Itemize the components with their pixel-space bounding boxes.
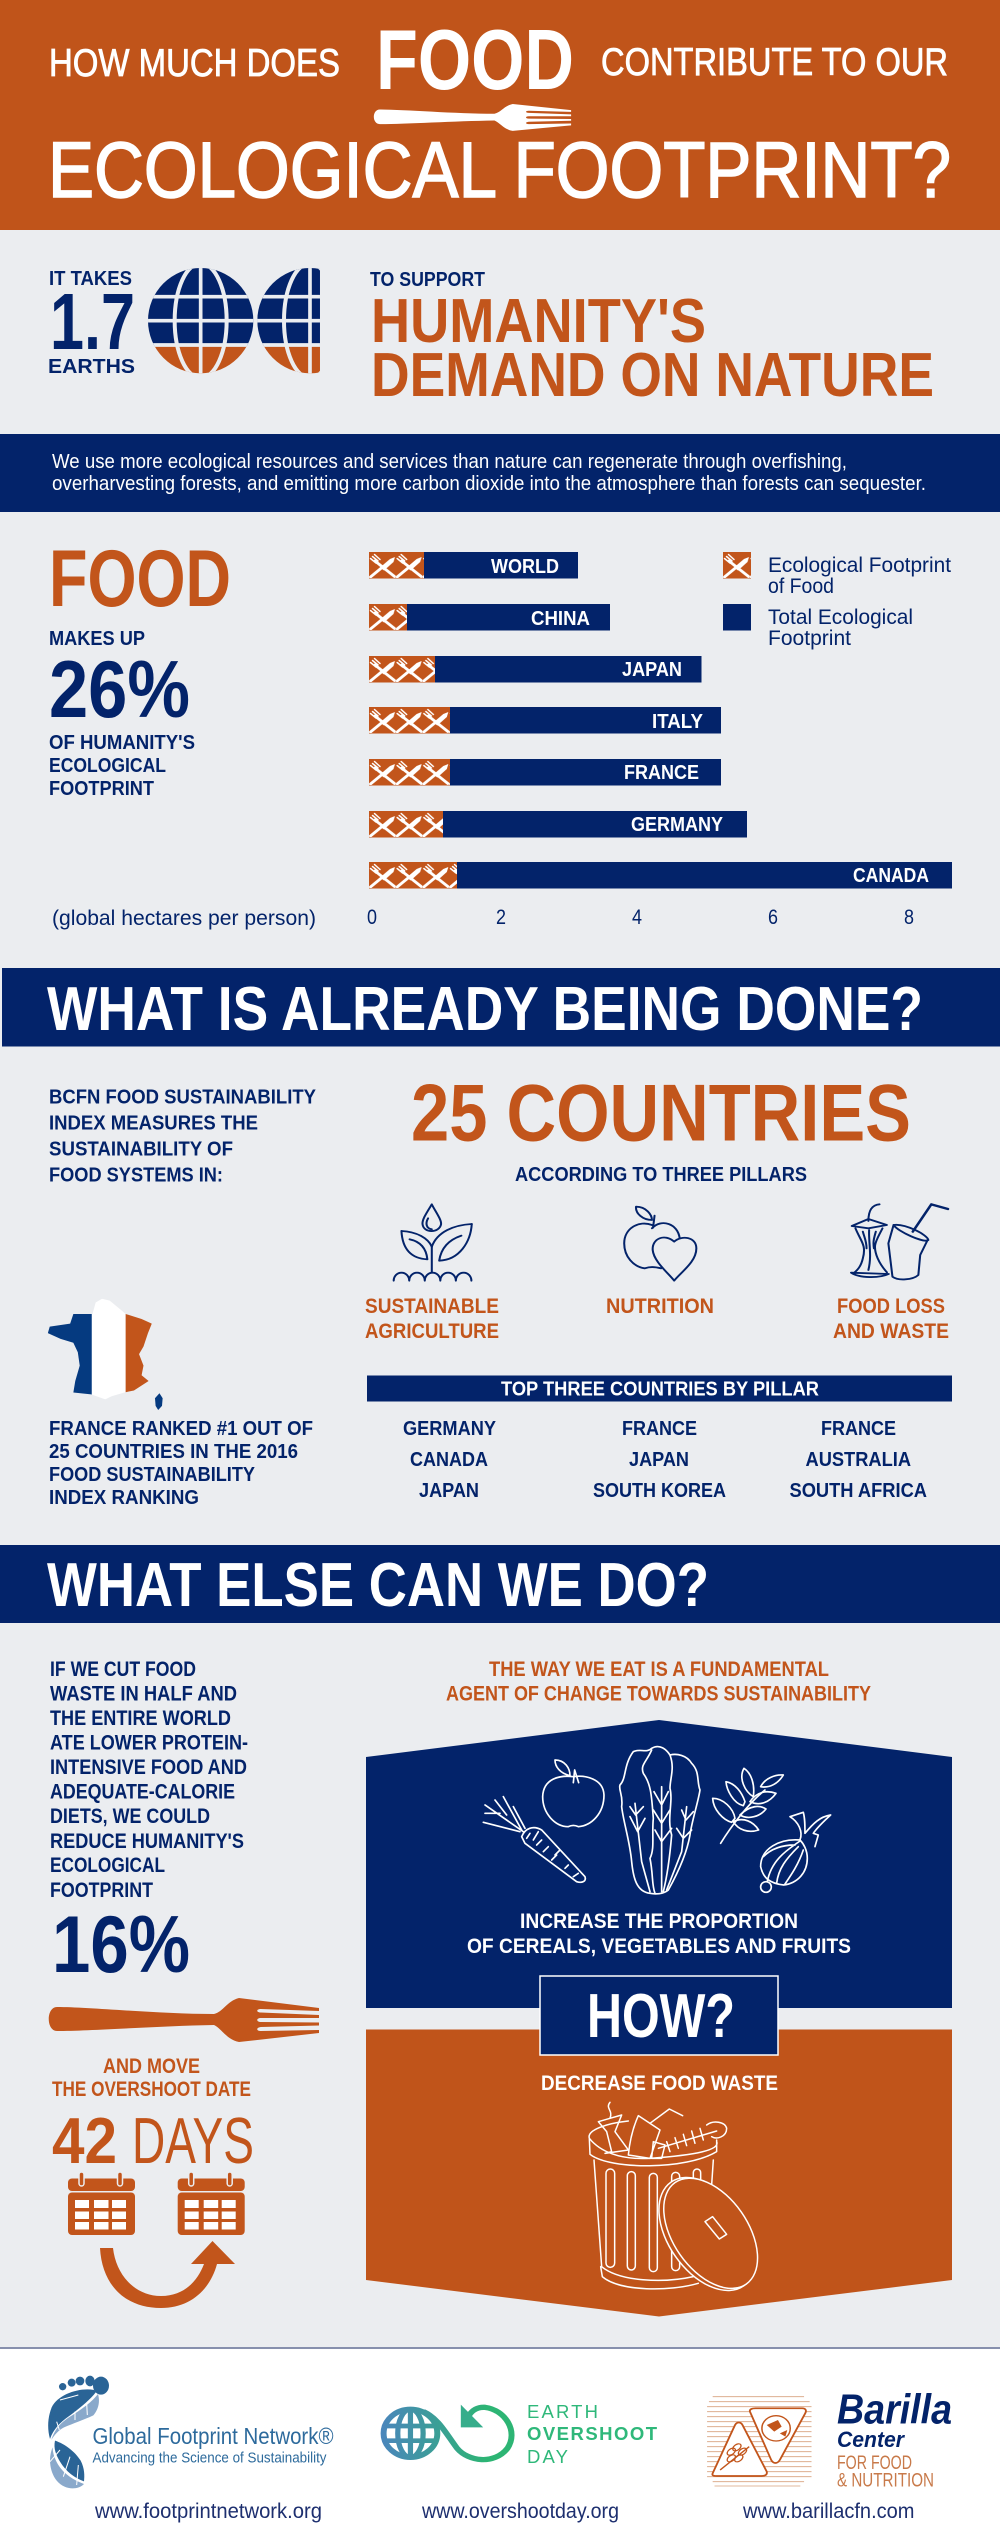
- legend label: food footprint: [768, 554, 951, 598]
- bar: world: WORLD: [491, 555, 559, 578]
- text block: bcfn index: BCFN FOOD SUSTAINABILITY: [49, 1086, 317, 1108]
- legend label: total footprint: Total Ecological: [768, 606, 913, 629]
- table column: food loss and waste: SOUTH AFRICA: [790, 1480, 927, 1502]
- text block: france ranked first: INDEX RANKING: [49, 1487, 199, 1509]
- logo text: earth overshoot day: DAY: [527, 2446, 568, 2467]
- url: overshoot day: www.overshootday.org: [421, 2500, 619, 2523]
- text: the way we eat: [446, 1658, 871, 1706]
- number: 26%: 26%: [49, 645, 190, 735]
- text: intro line 1: We use more ecological resources and services than nature can regenerate through overfishing,: [52, 451, 847, 473]
- panel: title header: [0, 0, 1000, 230]
- table column: nutrition: FRANCE: [622, 1418, 697, 1440]
- icon: full globe: [148, 268, 254, 374]
- text: increase the proportion: OF CEREALS, VEGETABLES AND FRUITS: [467, 1934, 851, 1958]
- logo text: earth overshoot day: OVERSHOOT: [527, 2423, 658, 2444]
- axis: labels: 2: [496, 906, 506, 929]
- bar: germany: [369, 811, 747, 838]
- icon: partial globe: [257, 268, 320, 374]
- text: and move the overshoot date: AND MOVE: [103, 2055, 200, 2078]
- logo text: earth overshoot day: EARTH: [527, 2401, 598, 2422]
- pillar label: sustainable agriculture: SUSTAINABLE: [365, 1295, 499, 1318]
- logo: barilla center: [707, 2386, 952, 2492]
- bar: italy: ITALY: [652, 710, 703, 733]
- table column: nutrition: JAPAN: [629, 1449, 689, 1471]
- pillar label: food loss and waste: AND WASTE: [833, 1320, 949, 1343]
- legend swatch: food footprint: [723, 552, 751, 578]
- logo: earth overshoot day: [384, 2401, 658, 2467]
- pillar label: sustainable agriculture: AGRICULTURE: [365, 1320, 499, 1343]
- legend swatch: total footprint: [723, 604, 751, 630]
- panel: increase proportion: [366, 1720, 952, 2008]
- legend label: total footprint: [768, 606, 913, 650]
- title line: how much does: HOW MUCH DOES: [49, 42, 340, 85]
- bar: japan: JAPAN: [622, 658, 682, 681]
- logo tagline: advancing the science: Advancing the Science of Sustainability: [92, 2449, 327, 2466]
- text block: cut food waste: ECOLOGICAL: [50, 1854, 165, 1877]
- text: to support: TO SUPPORT: [370, 268, 485, 291]
- icon: lettuce: [620, 1747, 700, 1894]
- icon: white fork: [374, 104, 571, 131]
- table column: sustainable agriculture: GERMANY: [403, 1418, 497, 1440]
- panel: it takes 1.7 earths: [49, 268, 932, 396]
- text: of humanity's ecological footprint: ECOLOGICAL: [49, 755, 166, 777]
- icon: carrot: [483, 1797, 585, 1882]
- text: decrease food waste: DECREASE FOOD WASTE: [541, 2071, 778, 2095]
- text block: bcfn index: SUSTAINABILITY OF: [49, 1138, 233, 1160]
- icon: apple and heart: [624, 1207, 696, 1281]
- panel: decrease food waste: [366, 2030, 952, 2316]
- table heading: top three countries: TOP THREE COUNTRIES BY PILLAR: [501, 1378, 820, 1400]
- bar: germany: GERMANY: [631, 813, 723, 836]
- text block: bcfn index: INDEX MEASURES THE: [49, 1112, 258, 1134]
- bar: italy: [369, 707, 721, 734]
- callout: how box: HOW?: [587, 1982, 735, 2051]
- logo text: for food and nutrition: & NUTRITION: [837, 2471, 934, 2492]
- text: of humanity's ecological footprint: OF HUMANITY'S: [49, 732, 195, 754]
- table column: food loss and waste: AUSTRALIA: [806, 1449, 911, 1471]
- icon: orange fork: [49, 1998, 319, 2042]
- text: it takes: IT TAKES: [49, 267, 132, 290]
- icon: calendar left: [68, 2172, 135, 2235]
- bar: france: [369, 759, 721, 786]
- text: and move the overshoot date: [52, 2055, 251, 2101]
- number: 1.7: 1.7: [50, 277, 135, 366]
- text block: cut food waste: [50, 1658, 248, 1902]
- logo: global footprint network: [48, 2376, 334, 2488]
- title word: food: FOOD: [376, 13, 574, 108]
- table column: sustainable agriculture: [403, 1418, 497, 1502]
- text: intro line 2: overharvesting forests, and emitting more carbon dioxide into the atmosphere than forests can sequester.: [52, 473, 926, 495]
- text block: cut food waste: WASTE IN HALF AND: [50, 1683, 237, 1706]
- logo text: earth overshoot day: [527, 2401, 658, 2467]
- text: increase the proportion: INCREASE THE PROPORTION: [520, 1909, 798, 1933]
- number: 42 days: 42: [52, 2104, 117, 2177]
- text block: france ranked first: FOOD SUSTAINABILITY: [49, 1464, 256, 1486]
- text block: cut food waste: FOOTPRINT: [50, 1879, 153, 1902]
- table column: food loss and waste: [790, 1418, 927, 1502]
- logo text: barilla: Barilla: [837, 2386, 952, 2432]
- section heading: what else can we do: WHAT ELSE CAN WE DO?: [47, 1551, 709, 1620]
- text block: france ranked first: [49, 1418, 313, 1509]
- bar chart: ecological footprint by country: [52, 552, 952, 930]
- bar: world: [369, 552, 578, 578]
- text block: france ranked first: FRANCE RANKED #1 OUT OF: [49, 1418, 313, 1440]
- text: earths: EARTHS: [48, 355, 135, 378]
- axis: labels: 8: [904, 906, 914, 929]
- text: makes up: MAKES UP: [49, 628, 145, 650]
- url: barilla center: www.barillacfn.com: [742, 2500, 914, 2523]
- text block: bcfn index: FOOD SYSTEMS IN:: [49, 1164, 223, 1186]
- text: and move the overshoot date: THE OVERSHOOT DATE: [52, 2078, 251, 2101]
- legend label: food footprint: Ecological Footprint: [768, 554, 951, 577]
- table column: sustainable agriculture: CANADA: [410, 1449, 488, 1471]
- heading: food: FOOD: [49, 534, 231, 624]
- heading: 25 countries: 25 COUNTRIES: [411, 1068, 911, 1158]
- text block: france ranked first: 25 COUNTRIES IN THE 2016: [49, 1441, 298, 1463]
- text: of humanity's ecological footprint: [49, 732, 195, 800]
- pillar label: sustainable agriculture: [365, 1295, 499, 1343]
- text block: cut food waste: INTENSIVE FOOD AND: [50, 1756, 247, 1779]
- panel: footer: [0, 2347, 1000, 2526]
- number: 42 days: [52, 2104, 254, 2177]
- number: 42 days: DAYS: [132, 2104, 254, 2177]
- text block: cut food waste: ADEQUATE-CALORIE: [50, 1781, 235, 1804]
- table column: nutrition: SOUTH KOREA: [593, 1480, 726, 1502]
- logo text: for food and nutrition: [837, 2453, 934, 2492]
- bar: canada: [369, 862, 952, 888]
- text block: cut food waste: DIETS, WE COULD: [50, 1805, 210, 1828]
- logo text: for food and nutrition: FOR FOOD: [837, 2453, 912, 2474]
- icon: calendar right: [178, 2172, 245, 2235]
- axis: labels: [52, 906, 914, 930]
- bar: china: CHINA: [531, 607, 590, 630]
- table column: sustainable agriculture: JAPAN: [419, 1480, 479, 1502]
- callout: how box: [540, 1976, 778, 2055]
- axis: labels: 6: [768, 906, 778, 929]
- table heading: top three countries: [367, 1376, 952, 1402]
- number: 16%: 16%: [52, 1900, 190, 1990]
- axis: labels: (global hectares per person): [52, 907, 316, 930]
- logo text: global footprint network: Global Footprint Network®: [92, 2423, 334, 2449]
- table column: food loss and waste: FRANCE: [821, 1418, 896, 1440]
- pillar label: food loss and waste: [833, 1295, 949, 1343]
- arrow: curved between calendars: [100, 2241, 235, 2308]
- icon: france flag map: [48, 1299, 163, 1410]
- section heading: what else can we do: [0, 1545, 1000, 1623]
- text block: cut food waste: THE ENTIRE WORLD: [50, 1707, 231, 1730]
- icon: trash can: [589, 2102, 777, 2308]
- pillar label: nutrition: NUTRITION: [606, 1295, 714, 1318]
- axis: labels: 4: [632, 906, 642, 929]
- bar: canada: CANADA: [853, 864, 929, 887]
- panel: intro band: [0, 434, 1000, 512]
- table column: nutrition: [593, 1418, 726, 1502]
- text block: cut food waste: ATE LOWER PROTEIN-: [50, 1732, 248, 1755]
- text block: cut food waste: REDUCE HUMANITY'S: [50, 1830, 244, 1853]
- axis: labels: 0: [367, 906, 377, 929]
- legend label: total footprint: Footprint: [768, 627, 851, 650]
- icon: apple: [543, 1760, 604, 1827]
- legend label: food footprint: of Food: [768, 575, 834, 598]
- text: the way we eat: THE WAY WE EAT IS A FUNDAMENTAL: [489, 1658, 829, 1681]
- text block: bcfn index: [49, 1086, 317, 1186]
- legend: [723, 552, 951, 650]
- logo text: center: Center: [837, 2427, 905, 2452]
- bar: france: FRANCE: [624, 761, 699, 784]
- bar: china: [369, 604, 610, 630]
- panel: food share statement: [49, 534, 231, 800]
- text block: cut food waste: IF WE CUT FOOD: [50, 1658, 196, 1681]
- icon: apple core and cup: [851, 1204, 948, 1279]
- url: footprint network: www.footprintnetwork.org: [94, 2500, 322, 2523]
- text: increase the proportion: [467, 1909, 851, 1958]
- bar: japan: [369, 656, 702, 682]
- text: of humanity's ecological footprint: FOOTPRINT: [49, 778, 154, 800]
- text: the way we eat: AGENT OF CHANGE TOWARDS SUSTAINABILITY: [446, 1683, 871, 1706]
- text: according to three pillars: ACCORDING TO THREE PILLARS: [515, 1164, 807, 1186]
- icon: sprout with water drop: [394, 1204, 472, 1281]
- icon: onion: [761, 1812, 831, 1892]
- heading: humanity's: HUMANITY'S: [371, 287, 706, 356]
- icon: leaf sprig: [713, 1768, 783, 1843]
- pillar label: food loss and waste: FOOD LOSS: [837, 1295, 945, 1318]
